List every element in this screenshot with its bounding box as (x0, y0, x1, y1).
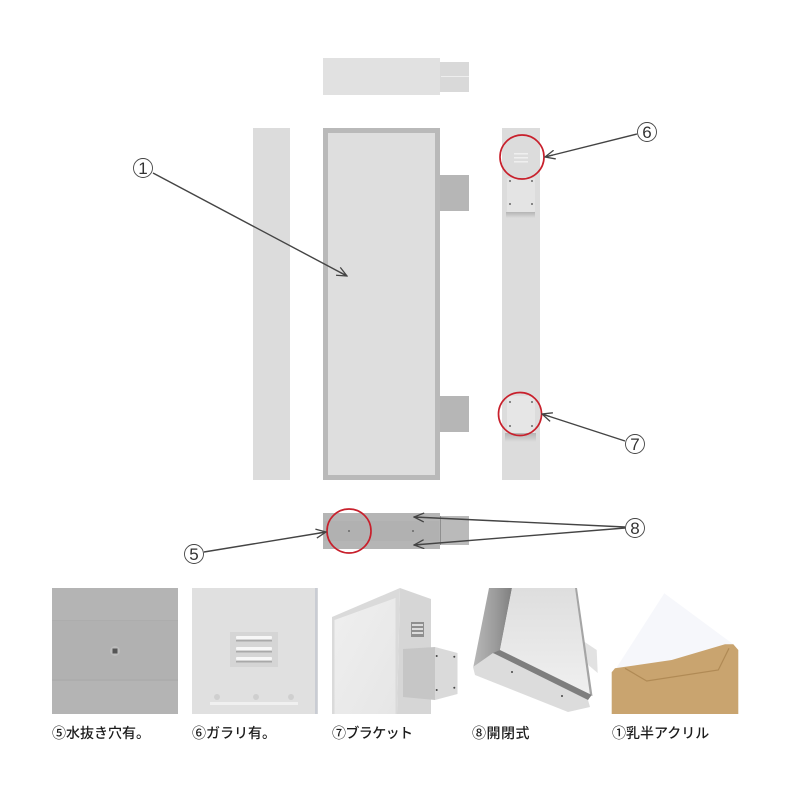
arrows: callout 8 (414, 517, 625, 545)
callout number 1 (134, 158, 152, 178)
callout number 8: 8 (630, 519, 640, 538)
front view of sign (323, 128, 469, 480)
caption: acrylic: ①乳半アクリル (612, 725, 709, 741)
caption: drain hole: ⑤水抜き穴有。 (52, 725, 150, 741)
arrow: callout 1 (153, 173, 347, 276)
photo: bracket (332, 588, 458, 714)
photo: hinged opening (473, 588, 598, 712)
callout number 6: 6 (642, 123, 652, 142)
callout number 8 (626, 518, 644, 538)
callout number 5: 5 (189, 545, 199, 564)
top view of sign (323, 58, 469, 95)
photo: louver (192, 588, 318, 714)
callout number 1: 1 (138, 159, 148, 178)
arrow: callout 7 (542, 414, 625, 441)
arrow: callout 6 (545, 134, 637, 157)
back view of sign (502, 128, 540, 480)
callout number 5 (184, 544, 204, 564)
caption: hinged: ⑧開閉式 (472, 725, 530, 741)
caption: louver: ⑥ガラリ有。 (192, 725, 276, 741)
photo: milky acrylic sheet (612, 593, 738, 714)
red highlight circle: louver (500, 135, 544, 179)
arrow: callout 5 (204, 532, 326, 552)
red highlight circle: bracket (498, 392, 542, 436)
photo: drain hole (52, 588, 178, 714)
bottom view of sign (323, 513, 469, 549)
callout number 7: 7 (630, 435, 640, 454)
callout number 7 (626, 434, 644, 454)
caption: bracket: ⑦ブラケット (332, 725, 412, 741)
callout number 6 (638, 122, 656, 142)
red highlight circle: drain hole (327, 509, 371, 553)
left side view (253, 128, 290, 480)
louver on back view (514, 153, 528, 162)
